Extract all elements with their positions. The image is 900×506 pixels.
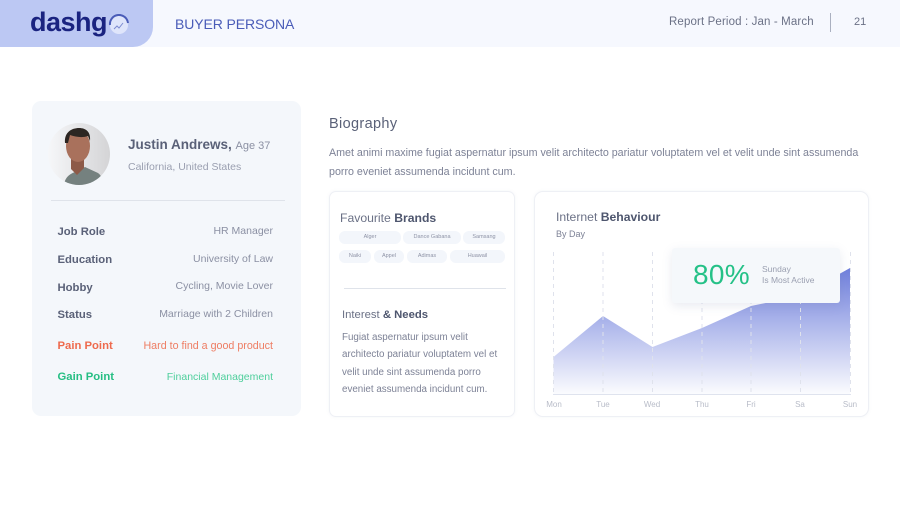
interest text: velit unde sint assumenda porro (342, 367, 481, 378)
chart heading: Internet Behaviour (556, 210, 660, 224)
callout label: Sunday (762, 264, 791, 274)
text: Tue (596, 400, 610, 409)
text: Fri (746, 400, 756, 409)
logo panel (0, 0, 153, 47)
callout: most active day (672, 248, 840, 303)
interest text (342, 332, 498, 395)
page number: 21 (854, 16, 866, 28)
text: Financial Management (167, 371, 273, 383)
header bar (0, 0, 900, 47)
brand chips: Dance Gabana (414, 234, 450, 240)
axis labels: Mon (546, 400, 562, 409)
gain point row: Gain Point (58, 371, 114, 383)
brand chips (339, 231, 505, 263)
panel: brands and interests (329, 191, 515, 417)
pain point row: Pain Point (58, 340, 113, 352)
callout label: Is Most Active (762, 275, 814, 285)
brand chips: Alger (364, 234, 376, 240)
interest heading: Interest & Needs (342, 309, 428, 321)
interest text: Fugiat aspernatur ipsum velit (342, 332, 468, 343)
location: California, United States (128, 161, 241, 173)
callout label (762, 264, 814, 285)
text: Hard to find a good product (143, 340, 273, 352)
interest text: eveniet assumenda incidunt cum. (342, 384, 487, 395)
biography text: porro eveniet assumenda incidunt cum. (329, 166, 516, 178)
education row: Education (58, 254, 112, 266)
report period: Report Period : Jan - March (669, 16, 814, 28)
brand chips: Samsang (472, 234, 496, 240)
text: Cycling, Movie Lover (176, 280, 273, 292)
panel: internet behaviour (534, 191, 869, 417)
brand chips: Appel (382, 253, 396, 259)
text: Marriage with 2 Children (159, 308, 273, 320)
biography text: Amet animi maxime fugiat aspernatur ipsum velit architecto pariatur voluptatem vel et velit unde sint assumenda (329, 147, 858, 159)
status row: Status (58, 309, 92, 321)
text: HR Manager (213, 225, 273, 237)
brand chips: Huawail (468, 253, 487, 259)
biography text (329, 147, 858, 178)
icon: portrait photo (59, 123, 110, 185)
brand chips: Naiki (349, 253, 361, 259)
text: Thu (695, 400, 709, 409)
interest text: architecto pariatur voluptatem vel et (342, 349, 497, 360)
area chart (553, 252, 851, 395)
name and age: Justin Andrews, Age 37 (128, 137, 270, 152)
brands heading: Favourite Brands (340, 211, 436, 225)
brand chips: Adimas (418, 253, 436, 259)
biography heading: Biography (329, 116, 397, 132)
job role row: Job Role (58, 226, 105, 238)
hobby row: Hobby (58, 282, 93, 294)
text: University of Law (193, 253, 273, 265)
icon: logo gauge (108, 14, 129, 34)
text: Sun (843, 400, 857, 409)
callout value: 80% (693, 259, 750, 290)
page title: BUYER PERSONA (175, 16, 294, 32)
text: Sa (795, 400, 805, 409)
panel: profile (32, 101, 301, 416)
chart subtitle: By Day (556, 229, 585, 239)
logo wordmark: dashg (30, 7, 107, 37)
text: Wed (644, 400, 660, 409)
